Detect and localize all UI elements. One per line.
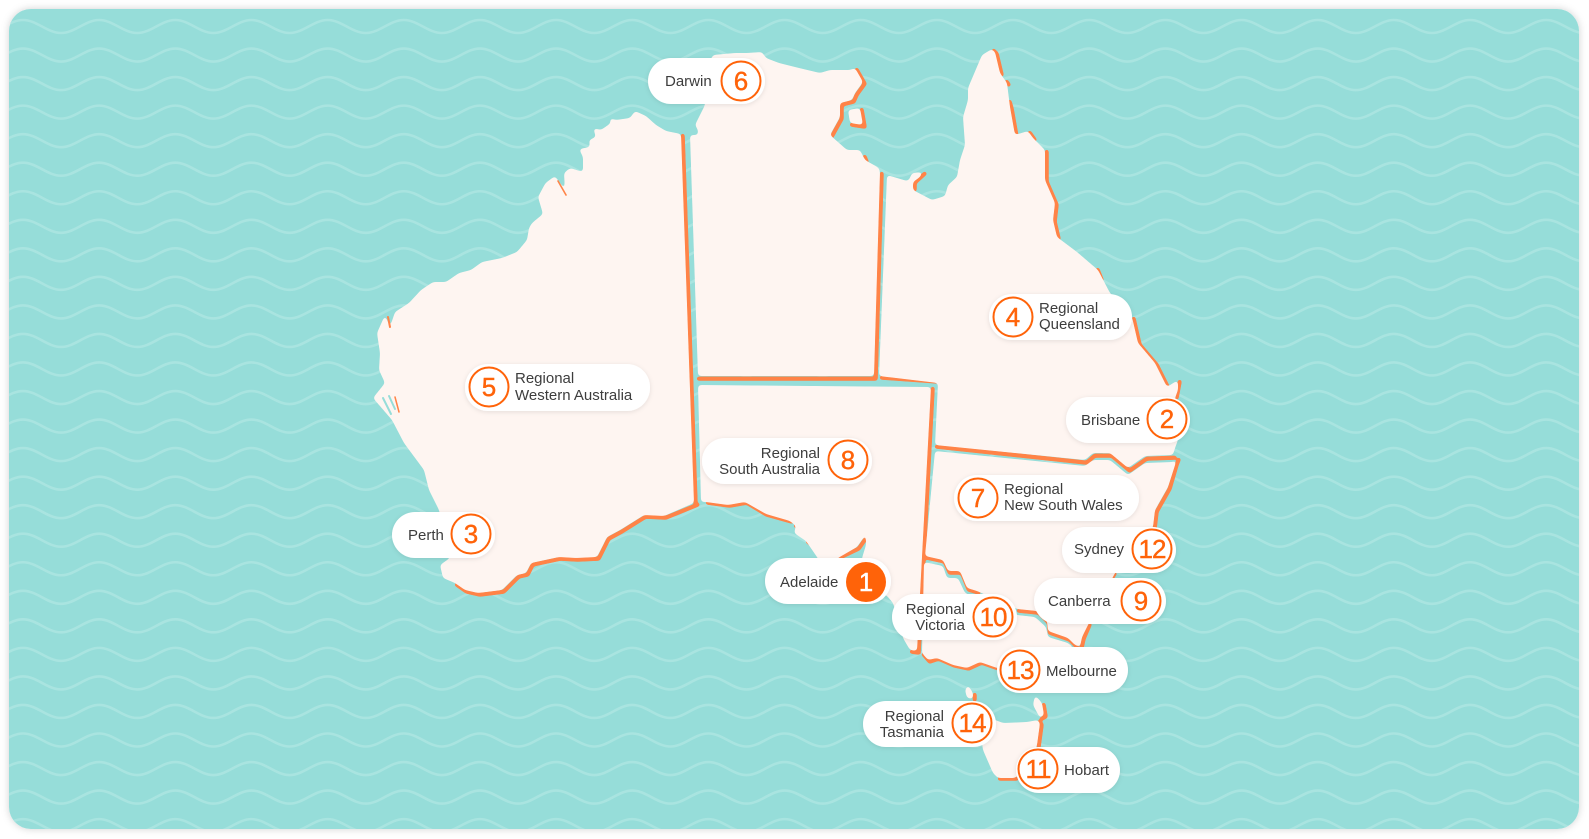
label: Regional New South Wales: New South Wales bbox=[1004, 497, 1123, 514]
label: Sydney bbox=[1062, 527, 1176, 573]
island: Groote Eylandt bbox=[848, 108, 863, 125]
label: Regional Queensland: Queensland bbox=[1039, 316, 1120, 333]
state: Victoria bbox=[922, 562, 1074, 670]
label: Adelaide bbox=[765, 558, 891, 604]
label: Brisbane bbox=[1066, 397, 1190, 443]
state: New South Wales bbox=[925, 451, 1177, 647]
number badge 2: 2 bbox=[1160, 404, 1174, 434]
label: Regional New South Wales: Regional bbox=[1004, 481, 1063, 498]
state: Queensland bbox=[879, 49, 1178, 468]
territory: Northern Territory bbox=[690, 52, 880, 376]
label: Darwin bbox=[648, 58, 765, 104]
state: Western Australia bbox=[373, 111, 694, 593]
label: Melbourne: Melbourne bbox=[1046, 663, 1117, 680]
number badge 9: 9 bbox=[1134, 586, 1148, 616]
number badge 8: 8 bbox=[841, 445, 855, 475]
number badge 10: 10 bbox=[980, 602, 1007, 632]
land: states and territories bbox=[373, 49, 1178, 778]
state: Tasmania bbox=[980, 718, 1040, 778]
number badge 1 (filled): 1 bbox=[859, 567, 873, 597]
label: Sydney: Sydney bbox=[1074, 541, 1125, 558]
label: Regional Queensland bbox=[989, 294, 1132, 340]
number badge 3: 3 bbox=[464, 519, 478, 549]
label: Perth: Perth bbox=[408, 527, 444, 544]
number badge 5 bbox=[470, 368, 508, 406]
Shark Bay inlets bbox=[383, 181, 566, 414]
label: Regional Tasmania: Tasmania bbox=[880, 724, 945, 741]
label: Regional Victoria: Victoria bbox=[915, 617, 966, 634]
label: Regional Tasmania bbox=[863, 701, 996, 747]
state: South Australia bbox=[698, 385, 931, 651]
map of Australia bbox=[373, 49, 1180, 779]
number badge 13: 13 bbox=[1007, 655, 1034, 685]
label: Canberra bbox=[1034, 578, 1166, 624]
number badge 4: 4 bbox=[1006, 302, 1020, 332]
label: Regional Western Australia: Western Australia bbox=[515, 387, 633, 404]
number badge 5: 5 bbox=[482, 372, 496, 402]
island: King Island bbox=[965, 685, 973, 699]
label: Regional Victoria bbox=[892, 594, 1017, 640]
number badge 6: 6 bbox=[734, 66, 748, 96]
label: Regional Queensland: Regional bbox=[1039, 300, 1098, 317]
number badge 7 bbox=[958, 478, 998, 518]
label: Regional Victoria: Regional bbox=[906, 601, 965, 618]
label: Perth bbox=[392, 512, 495, 558]
number badge 14: 14 bbox=[959, 708, 986, 738]
label: Canberra: Canberra bbox=[1048, 593, 1111, 610]
label: Regional South Australia: Regional bbox=[761, 445, 820, 462]
number badge 12: 12 bbox=[1139, 534, 1166, 564]
label: Hobart bbox=[1016, 747, 1120, 793]
label: Regional Western Australia: Regional bbox=[515, 370, 574, 387]
label: Regional South Australia: South Australia bbox=[719, 461, 821, 478]
label: Hobart: Hobart bbox=[1064, 762, 1110, 779]
label: Regional Western Australia bbox=[465, 364, 650, 411]
label: Melbourne bbox=[997, 647, 1128, 693]
label: Brisbane: Brisbane bbox=[1081, 412, 1140, 429]
number badge 7: 7 bbox=[971, 483, 985, 513]
label: Regional Tasmania: Regional bbox=[885, 708, 944, 725]
label: Adelaide: Adelaide bbox=[780, 574, 838, 591]
label: Regional South Australia bbox=[702, 438, 872, 484]
number badge 8 bbox=[828, 440, 868, 480]
island: Flinders Island bbox=[1033, 695, 1044, 718]
label: Darwin: Darwin bbox=[665, 73, 712, 90]
orange state edge accents bbox=[457, 51, 1180, 779]
label: Regional New South Wales bbox=[954, 475, 1139, 521]
number badge 11: 11 bbox=[1026, 754, 1051, 784]
number badge 4 bbox=[994, 298, 1032, 336]
